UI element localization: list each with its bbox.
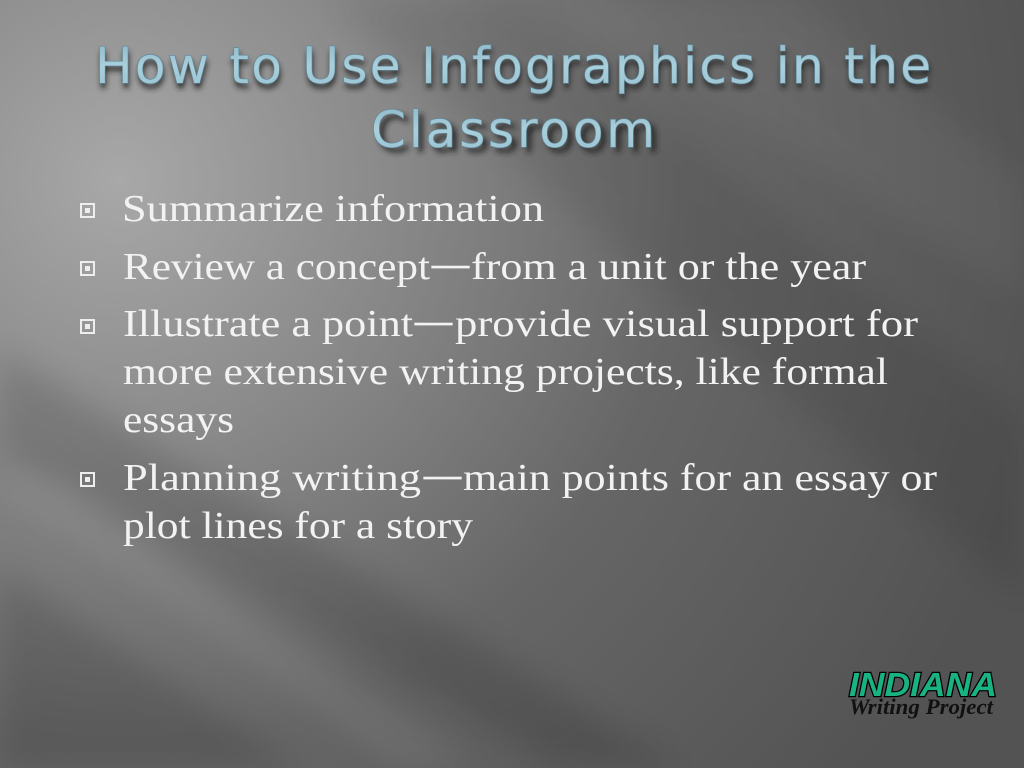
title: Classroom <box>376 106 660 164</box>
bullet 3: Illustrate a point: provide visual support for <box>455 303 918 345</box>
bullet 2: Review a concept: — <box>431 243 470 285</box>
title: How to Use Infographics in the <box>95 37 931 95</box>
logo: Indiana Writing Project: INDIANA <box>849 666 997 703</box>
title: How to Use Infographics in the <box>96 42 932 100</box>
bullet 3: Illustrate a point: Illustrate a point <box>123 303 414 345</box>
bullet list <box>80 188 937 547</box>
bullet 3: Illustrate a point: essays <box>123 399 234 441</box>
bullet 2: Review a concept <box>80 243 866 288</box>
bullet 3: Illustrate a point <box>80 300 918 441</box>
bullet 4: Planning writing: plot lines for a story <box>123 505 473 547</box>
bullet 4: Planning writing: Planning writing <box>123 457 421 499</box>
title: Classroom <box>371 101 655 159</box>
bullet 4: Planning writing <box>80 454 937 547</box>
bullet 4: Planning writing: — <box>423 454 462 496</box>
bullet 3: Illustrate a point: — <box>414 300 453 342</box>
bullet 2: Review a concept: Review a concept <box>123 246 430 288</box>
logo: Indiana Writing Project: Writing Project <box>849 694 994 719</box>
bullet 2: Review a concept: from a unit or the year <box>471 246 866 288</box>
title <box>95 37 932 164</box>
bullet 4: Planning writing: main points for an essay or <box>463 457 937 499</box>
bullet 3: Illustrate a point: more extensive writing projects, like formal <box>123 351 888 393</box>
logo: Indiana Writing Project <box>849 666 997 719</box>
bullet 1: Summarize information: Summarize information <box>122 188 544 230</box>
